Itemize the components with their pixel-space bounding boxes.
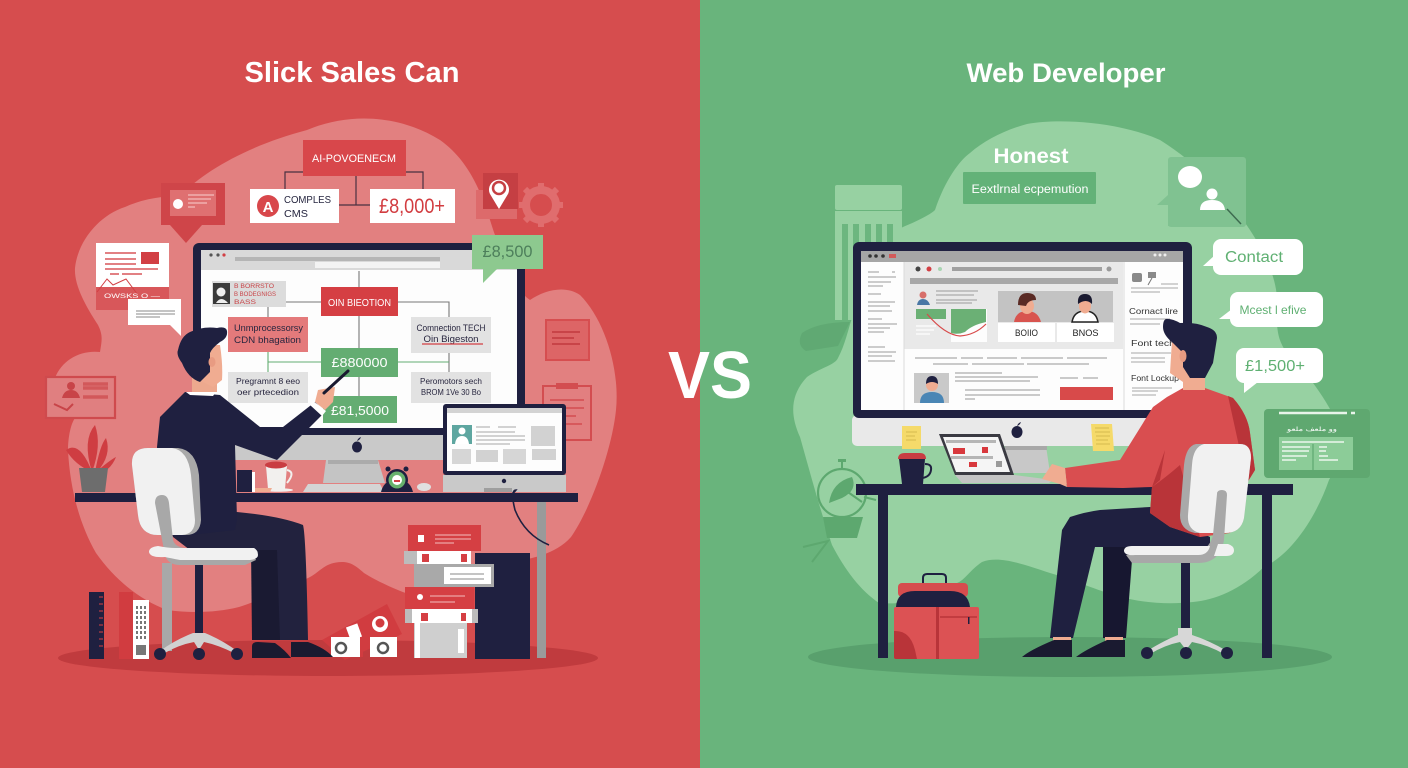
photo: profile: [914, 373, 949, 403]
box: integration red: OIN BIEOTION: [328, 298, 391, 309]
icon: potted plant: [66, 425, 116, 492]
icon: cable: [513, 490, 549, 545]
callout: most effective: [1219, 292, 1323, 327]
flow diagram: top pricing boxes: COMPLES: [284, 195, 331, 206]
box: profile note: B BODEGNIGS: [234, 292, 276, 298]
panel: web developer (green): [700, 0, 1408, 768]
callout: price 1500: £1,500+: [1245, 358, 1305, 375]
icon: document card: [96, 243, 169, 310]
box: cdn integration pink: CDN bhagation: [234, 335, 301, 345]
icon: white speech bubble: [128, 299, 181, 336]
icon: red backpack: [894, 574, 979, 659]
icon: column building: [835, 185, 902, 320]
box: program note: Pregramnt 8 eeo: [236, 376, 300, 386]
icon: coffee cup: [263, 462, 293, 492]
flow diagram: top pricing boxes: CMS: [284, 209, 308, 220]
icon: laptop: [939, 434, 1053, 483]
icon: alarm clock: [381, 466, 413, 492]
icon: contact chat bubble: [1157, 157, 1246, 227]
box: promotors note: Peromotors sech: [420, 376, 482, 386]
icon: location pin and gear: [476, 173, 563, 227]
icon: profile monitor: [46, 377, 115, 418]
icon: apple logo: [352, 437, 362, 452]
box: program note: oer prtecedion: [237, 387, 299, 397]
boxes and cards on floor: [322, 604, 402, 660]
box: green price: £880000: [332, 355, 388, 370]
icons: sidebar tools: [1132, 272, 1156, 285]
sidebar labels: Cornact lire: [1129, 306, 1178, 316]
figure: salesperson: [157, 327, 348, 658]
box: green total: [323, 396, 397, 423]
box: cdn integration pink: Unmprocessorsy: [234, 323, 303, 333]
box: connection tech: [411, 317, 491, 353]
panel icon: web page card: وو ملعف ملعو: [1286, 426, 1337, 433]
box: green total: £81,5000: [331, 403, 389, 418]
icon: document card: OWSKS O —: [104, 294, 160, 300]
icon: faint chair silhouette: [800, 322, 850, 351]
icon: mouse: [417, 483, 431, 491]
callout: green price tag: £8,500: [482, 242, 532, 261]
people tiles: bio cards: BOIIO: [1015, 328, 1038, 338]
icon: apple logo: [1012, 422, 1022, 438]
sidebar labels: Font Lockup: [1131, 373, 1179, 383]
sidebar labels: Font tech: [1131, 338, 1175, 348]
box: profile note: BASS: [234, 300, 256, 306]
panel: slick sales can (red): [0, 0, 700, 768]
chart: mini area chart: [927, 309, 987, 342]
sticky notes: [902, 424, 1114, 451]
icon: mini profile: [917, 292, 930, 305]
box: cdn integration pink: [228, 317, 308, 352]
box: program note: [228, 372, 308, 403]
heading: honest: Honest: [994, 145, 1068, 168]
books on floor: [89, 592, 149, 659]
icons: clipboards on right: [543, 320, 591, 440]
flow diagram: top pricing boxes: AI-POVOENECM: [312, 153, 396, 165]
sidebar labels: [1129, 306, 1179, 383]
box: connection tech: Comnection TECH: [416, 323, 486, 333]
chair: developer office chair: [1124, 444, 1251, 659]
icon: stopwatch and plant: [803, 459, 876, 562]
monitor: small secondary computer: [443, 404, 566, 492]
label: external expectation: Eextlrnal ecpemution: [972, 184, 1088, 196]
callout: price 1500: [1236, 348, 1323, 393]
callout: contact: Contact: [1225, 249, 1284, 266]
flow diagram: top pricing boxes: A: [263, 199, 274, 216]
box: promotors note: BROM 1Ve 30 Bo: [421, 387, 481, 397]
label: external expectation: [963, 172, 1096, 204]
people tiles: bio cards: [998, 291, 1114, 342]
panel icon: web page card: [1264, 409, 1370, 478]
books and tower stack: [404, 525, 530, 659]
title: web developer: Web Developer: [966, 58, 1166, 88]
title: slick sales can: Slick Sales Can: [244, 57, 460, 89]
heading: vs: VS: [668, 338, 752, 413]
desk: sales desk with items: [66, 425, 578, 658]
box: green price: [321, 348, 398, 377]
callout: most effective: Mcest l efive: [1240, 303, 1307, 317]
desk: developer desk with items: [856, 434, 1293, 658]
monitor: large computer with flowchart: [193, 243, 525, 483]
monitor: large computer with web layout: [852, 242, 1192, 473]
flow diagram: top pricing boxes: [250, 140, 455, 223]
box: integration red: [321, 287, 398, 316]
callout: green price tag: [472, 235, 543, 283]
icon: red chat bubble: [161, 183, 225, 243]
box: promotors note: [411, 372, 491, 403]
callout: contact: [1203, 239, 1303, 275]
icon: keyboard: [303, 484, 384, 492]
box: profile note: B BORRSTO: [234, 284, 274, 290]
people tiles: bio cards: BNOS: [1072, 328, 1098, 338]
flow diagram: top pricing boxes: £8,000+: [379, 195, 445, 218]
box: connection tech: Oin Bigeston: [424, 334, 478, 344]
icon: coffee mug: [898, 453, 931, 484]
box: profile note: [212, 281, 286, 307]
chair: sales office chair: [132, 448, 258, 660]
figure: web developer: [1022, 319, 1255, 657]
